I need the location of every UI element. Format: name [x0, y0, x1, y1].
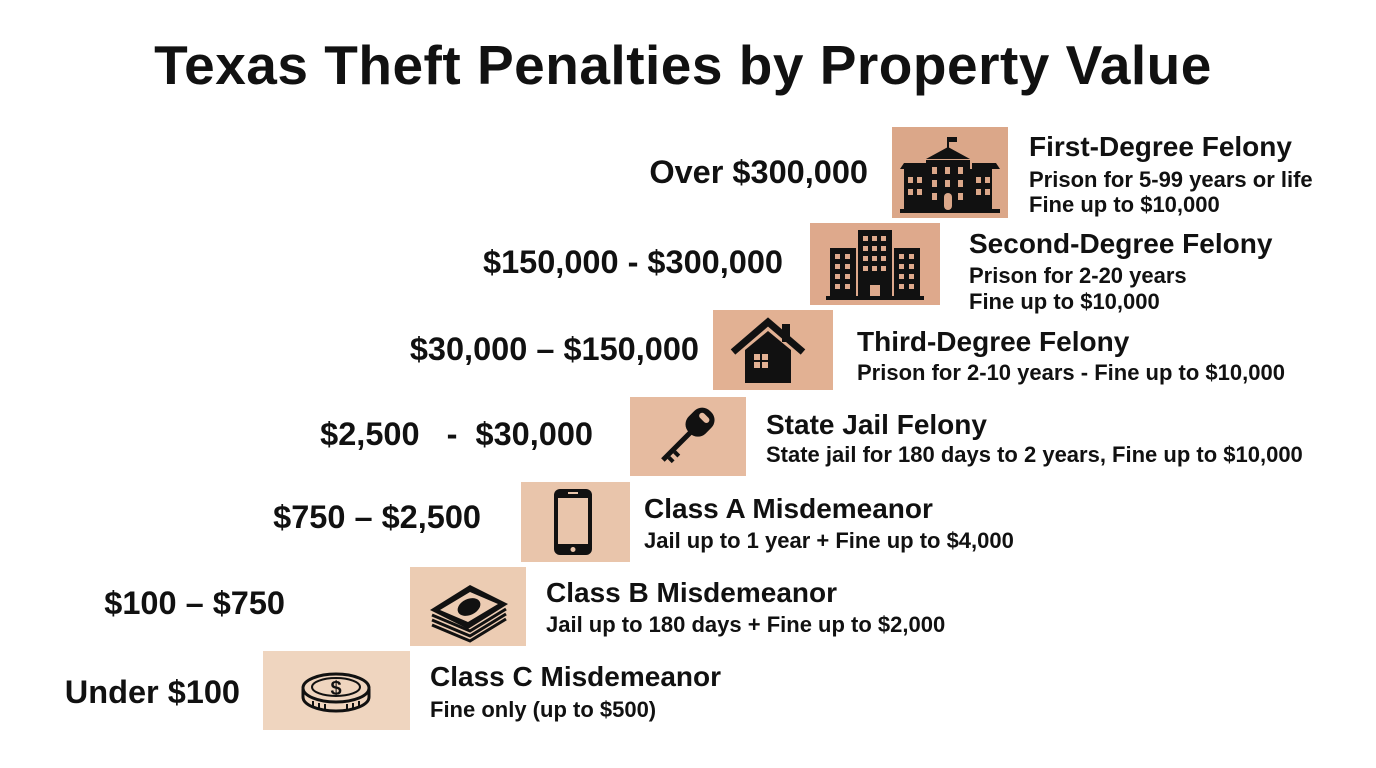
- icon box: phone: [521, 482, 630, 562]
- title: Texas Theft Penalties by Property Value: [154, 34, 1212, 96]
- heading: Third-Degree Felony: [857, 326, 1129, 357]
- penalty text: Fine up to $10,000: [969, 289, 1160, 314]
- heading: Class A Misdemeanor: [644, 493, 933, 524]
- penalty text: Prison for 5-99 years or life: [1029, 167, 1313, 192]
- heading: Class C Misdemeanor: [430, 661, 721, 692]
- row 5: class A misdemeanor: [273, 482, 1014, 562]
- range label: $30,000 – $150,000: [410, 331, 699, 367]
- row 7: class C misdemeanor: [65, 651, 721, 730]
- penalty text: [1029, 167, 1313, 217]
- heading: Class B Misdemeanor: [546, 577, 837, 608]
- icon box: key: [630, 397, 746, 476]
- penalty text: Jail up to 1 year + Fine up to $4,000: [644, 528, 1014, 553]
- range label: Under $100: [65, 674, 240, 710]
- range label: $100 – $750: [104, 585, 285, 621]
- penalty text: [969, 263, 1187, 314]
- range label: $2,500 - $30,000: [320, 416, 593, 452]
- heading: Second-Degree Felony: [969, 228, 1272, 259]
- range label: $150,000 - $300,000: [483, 244, 783, 280]
- icon box: courthouse: [892, 127, 1008, 218]
- icon box: house: [713, 310, 833, 390]
- row 1: first-degree felony: [649, 127, 1313, 218]
- heading: First-Degree Felony: [1029, 131, 1292, 162]
- range label: $750 – $2,500: [273, 499, 481, 535]
- icon box: cash stack: [410, 567, 526, 646]
- row 4: state jail felony: [320, 397, 1303, 476]
- row 6: class B misdemeanor: [104, 567, 945, 646]
- penalty text: Jail up to 180 days + Fine up to $2,000: [546, 612, 945, 637]
- icon box: coin: $: [330, 678, 342, 700]
- penalty text: Prison for 2-10 years - Fine up to $10,000: [857, 360, 1285, 385]
- row 3: third-degree felony: [410, 310, 1285, 390]
- row 2: second-degree felony: [483, 223, 1272, 314]
- icon box: office buildings: [810, 223, 940, 305]
- penalty text: Fine only (up to $500): [430, 697, 656, 722]
- icon box: coin: [263, 651, 410, 730]
- penalty text: State jail for 180 days to 2 years, Fine up to $10,000: [766, 442, 1303, 467]
- heading: State Jail Felony: [766, 409, 987, 440]
- range label: Over $300,000: [649, 154, 868, 190]
- penalty text: Fine up to $10,000: [1029, 192, 1220, 217]
- penalty text: Prison for 2-20 years: [969, 263, 1187, 288]
